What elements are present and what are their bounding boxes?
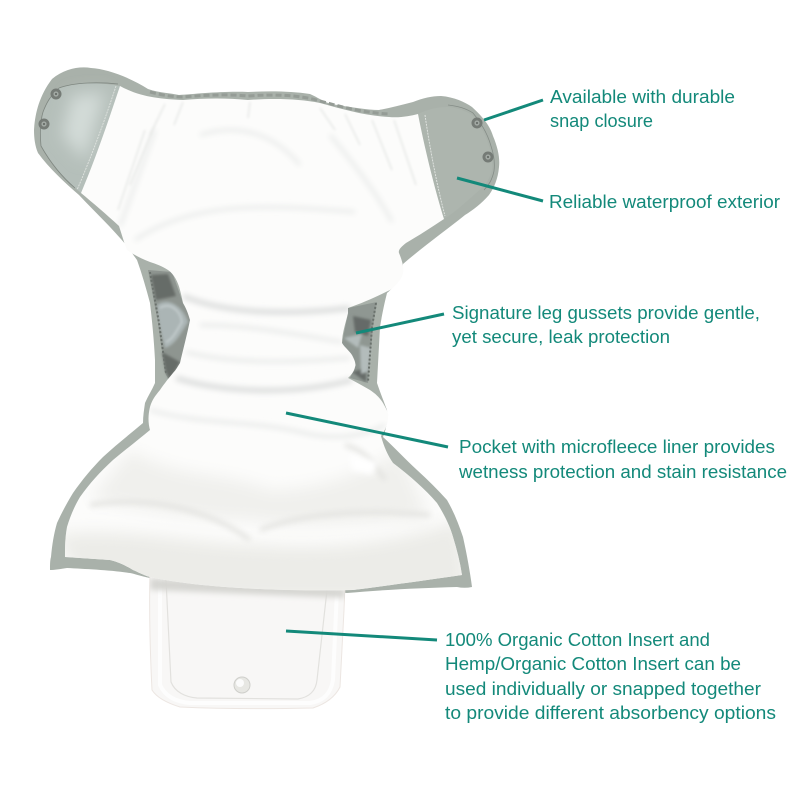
callout: snap closure xyxy=(484,87,735,131)
callout: waterproof exterior xyxy=(457,178,780,212)
snap: left lower xyxy=(38,118,50,130)
label: snap closure xyxy=(550,87,735,131)
label: leg gussets: yet secure, leak protection xyxy=(452,327,670,347)
label: leg gussets xyxy=(452,303,760,347)
callout: leg gussets xyxy=(356,303,760,347)
label: cotton insert: used individually or snapped together xyxy=(445,679,761,699)
callout: pocket liner xyxy=(286,413,787,482)
label: snap closure: snap closure xyxy=(550,111,653,131)
lower fleece shading xyxy=(65,524,462,590)
label: leg gussets: Signature leg gussets provide gentle, xyxy=(452,303,760,323)
label: snap closure: Available with durable xyxy=(550,87,735,107)
waistband gathers xyxy=(150,92,389,114)
insert snap xyxy=(234,677,250,693)
label: cotton insert: Hemp/Organic Cotton Insert can be xyxy=(445,654,741,674)
label: pocket liner: wetness protection and stain resistance xyxy=(458,462,787,482)
central folds xyxy=(120,130,392,240)
left wing inner panel xyxy=(40,83,120,193)
label: cotton insert xyxy=(445,630,776,723)
leader line: pocket liner xyxy=(286,413,448,447)
diaper photo illustration xyxy=(34,67,499,709)
right wing inner panel xyxy=(418,107,492,219)
microfleece liner xyxy=(55,86,470,600)
label: pocket liner: Pocket with microfleece liner provides xyxy=(459,437,775,457)
snap: left upper xyxy=(50,88,62,100)
label: cotton insert: to provide different absorbency options xyxy=(445,703,776,723)
top band gathers xyxy=(118,102,416,210)
snap: right upper xyxy=(472,118,482,128)
leader line: leg gussets xyxy=(356,314,444,333)
leader line: cotton insert xyxy=(286,631,437,640)
callout: cotton insert xyxy=(286,630,776,723)
label: cotton insert: 100% Organic Cotton Insert and xyxy=(445,630,710,650)
left leg gusset xyxy=(148,270,192,382)
leader line: snap closure xyxy=(484,100,543,120)
diaper outer shell xyxy=(34,67,499,593)
leader line: waterproof exterior xyxy=(457,178,543,201)
label: waterproof exterior: Reliable waterproof exterior xyxy=(549,192,780,212)
snap: right lower xyxy=(482,152,494,162)
right leg gusset xyxy=(342,302,377,383)
insert pad xyxy=(150,570,345,709)
label: pocket liner xyxy=(458,437,787,482)
